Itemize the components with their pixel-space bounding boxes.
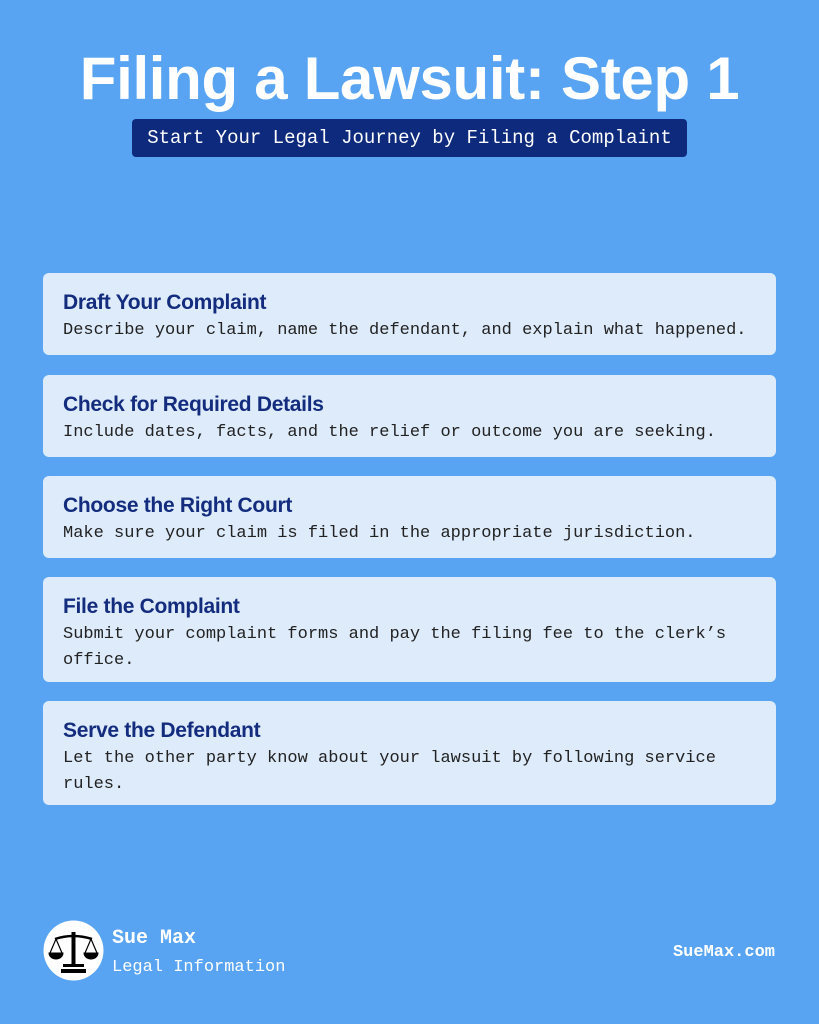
card: right court: Make sure your claim is filed in the appropriate jurisdiction.	[63, 524, 696, 543]
card: file complaint	[43, 577, 776, 682]
brand tagline: Legal Information	[112, 958, 285, 977]
website: SueMax.com	[673, 943, 775, 962]
subtitle: Start Your Legal Journey by Filing a Complaint	[147, 127, 672, 149]
card: file complaint: Submit your complaint forms and pay the filing fee to the clerk’s office.	[63, 625, 726, 670]
card: serve defendant: Let the other party know about your lawsuit by following service rules.	[63, 749, 716, 794]
icon: scales logo	[44, 920, 104, 980]
subtitle	[132, 119, 687, 157]
card: draft complaint: Draft Your Complaint	[63, 291, 266, 314]
brand name: Sue Max	[112, 927, 196, 950]
card: required details: Check for Required Details	[63, 393, 324, 416]
card: draft complaint	[43, 273, 776, 355]
card: required details	[43, 375, 776, 457]
card: draft complaint: Describe your claim, name the defendant, and explain what happened.	[63, 321, 747, 340]
card: right court: Choose the Right Court	[63, 494, 292, 517]
card: file complaint: File the Complaint	[63, 595, 240, 618]
card: required details: Include dates, facts, and the relief or outcome you are seeking.	[63, 423, 716, 442]
title: Filing a Lawsuit: Step 1	[80, 45, 739, 112]
card: serve defendant: Serve the Defendant	[63, 719, 260, 742]
card: right court	[43, 476, 776, 558]
card: serve defendant	[43, 701, 776, 805]
